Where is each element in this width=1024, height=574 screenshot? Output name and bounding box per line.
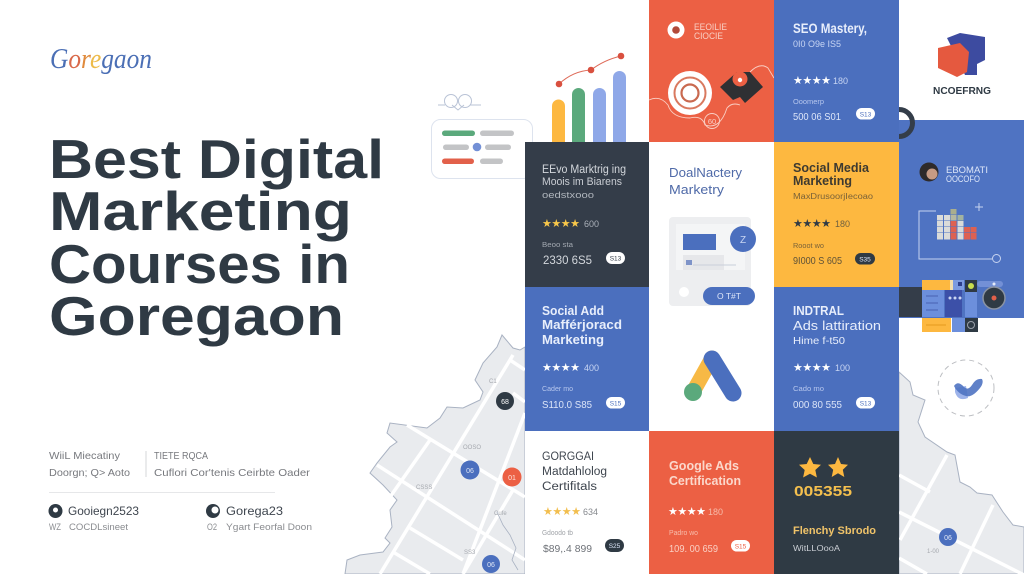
icon: Google Ads style logo bbox=[684, 358, 733, 401]
main title bbox=[49, 128, 384, 347]
footer: first location: Gooiegn2523 bbox=[68, 504, 139, 518]
icon: dark chevron shape bbox=[720, 72, 763, 103]
map: right area with roads and pin bbox=[899, 372, 1024, 574]
panel: INDTRAL blue card: Ads lattiration bbox=[793, 319, 881, 333]
panel: GORGGAI white card: Matdahlolog bbox=[542, 466, 607, 478]
panel: Google Ads orange card: ★★★★ bbox=[668, 505, 706, 518]
logo wordmark: NCOEFRNG bbox=[933, 85, 991, 97]
footer: course details: WiiL Miecatiny bbox=[49, 450, 121, 462]
panel: Google Ads orange card bbox=[649, 431, 774, 574]
icon: two gold stars bbox=[799, 457, 848, 478]
panel: EEvo Marketing dark card: 2330 6S5 bbox=[543, 255, 592, 267]
panel: top right white logo block bbox=[899, 0, 1024, 120]
panel: Social Media yellow card: Rooot wo bbox=[793, 243, 824, 250]
profile text: OOCOFO bbox=[946, 174, 980, 184]
icon: dashed circle with checkmark bbox=[938, 360, 994, 416]
panel: SEO Mastery card: S13 bbox=[860, 112, 872, 118]
panel: SEO Mastery card: ★★★★ bbox=[793, 74, 831, 87]
panel: Google Ads orange card: Certification bbox=[669, 473, 741, 488]
center card heading: DoalNactery bbox=[669, 165, 743, 180]
footer: course details: Cuflori Cor'tenis Ceirbte Oader bbox=[154, 467, 311, 479]
panel: GORGGAI white card: $89,.4 899 bbox=[543, 543, 592, 555]
panel: Google Ads orange card: Google Ads bbox=[669, 458, 739, 473]
icon: portrait bbox=[920, 162, 938, 182]
panel: Social Media yellow card: 9I000 S 605 bbox=[793, 255, 842, 267]
panel: SEO Mastery card: Ooomerp bbox=[793, 99, 824, 106]
panel: Social Add blue card: Cader mo bbox=[542, 386, 573, 393]
map labels: CSSS bbox=[416, 485, 432, 491]
map labels: Cufe bbox=[494, 511, 507, 517]
footer: second location: Gorega23 bbox=[226, 504, 283, 518]
panel: EEvo Marketing dark card: oedstxooo bbox=[542, 190, 594, 200]
panel: EEvo Marketing dark card: EEvo Marktrig ing bbox=[542, 164, 626, 176]
map pin: blue bbox=[460, 460, 480, 480]
profile text: EBOMATI bbox=[946, 165, 988, 175]
panel: GORGGAI white card bbox=[525, 431, 649, 574]
panel: INDTRAL blue card: ★★★★ bbox=[793, 361, 831, 374]
main title: Courses in bbox=[49, 233, 350, 295]
bar chart with trend line bbox=[552, 53, 626, 142]
panel: Social Media yellow card: Marketing bbox=[793, 173, 852, 188]
edit button: Z bbox=[740, 235, 746, 246]
panel: Google Ads orange card: 180 bbox=[708, 507, 723, 518]
panel: right blue dashboard bbox=[899, 120, 1024, 318]
panel: SEO Mastery card: SEO Mastery, bbox=[793, 20, 867, 36]
panel: SEO Mastery card: 180 bbox=[833, 76, 848, 87]
dark band bbox=[899, 287, 927, 317]
footer: course details: TIETE RQCA bbox=[154, 450, 208, 462]
small value badge: 60 bbox=[708, 117, 716, 126]
map pin: orange bbox=[502, 468, 522, 486]
panel: EEvo Marketing dark card bbox=[525, 142, 649, 287]
map labels: OOSO bbox=[463, 445, 481, 451]
map pin: blue: 06 bbox=[466, 468, 474, 475]
panel: SEO Mastery card: 0I0 O9e IS5 bbox=[793, 39, 841, 50]
panel: GORGGAI white card: Certifitals bbox=[542, 481, 597, 493]
panel: Google Ads orange card: 109. 00 659 bbox=[669, 543, 718, 555]
card label bbox=[694, 22, 727, 41]
footer: first location: COCDLsineet bbox=[69, 522, 129, 532]
panel: Social Media yellow card: Social Media bbox=[793, 160, 870, 175]
map pin: right blue bbox=[939, 528, 957, 546]
panel: SEO Mastery card: 500 06 S01 bbox=[793, 111, 841, 123]
map labels: SS3 bbox=[464, 550, 476, 556]
footer: first location bbox=[48, 504, 139, 532]
panel: orange icons card bbox=[649, 0, 774, 142]
panel: INDTRAL blue card: INDTRAL bbox=[793, 304, 844, 318]
panel: INDTRAL blue card: 000 80 555 bbox=[793, 399, 842, 411]
dashboard tile montage bbox=[922, 280, 1005, 332]
footer: second location: Ygart Feorfal Doon bbox=[226, 522, 312, 532]
panel: INDTRAL blue card: 100 bbox=[835, 363, 850, 374]
panel: Social Add blue card: S15 bbox=[610, 400, 622, 408]
map pin: orange: 01 bbox=[508, 475, 516, 482]
panel: EEvo Marketing dark card: Moois im Biarens bbox=[542, 176, 622, 188]
map: left area with roads and pins bbox=[345, 335, 525, 574]
panel: INDTRAL blue card bbox=[774, 287, 899, 431]
panel: INDTRAL blue card: S13 bbox=[860, 400, 872, 408]
panel: EEvo Marketing dark card: ★★★★ bbox=[542, 217, 580, 230]
panel: Social Add blue card: Marketing bbox=[542, 333, 604, 347]
footer: course details bbox=[49, 450, 311, 493]
map labels: C1 bbox=[489, 379, 497, 385]
panel: Social Add blue card bbox=[525, 287, 649, 431]
panel: SEO Mastery card bbox=[774, 0, 899, 142]
panel: EEvo Marketing dark card: 600 bbox=[584, 219, 599, 230]
footer info block bbox=[48, 450, 312, 532]
card label: EEOILIE bbox=[694, 22, 727, 32]
pill button: O T#T bbox=[717, 291, 741, 301]
center card heading: Marketry bbox=[669, 182, 725, 197]
map pin: dark: 68 bbox=[501, 399, 509, 406]
main title: Best Digital bbox=[49, 128, 384, 190]
footer: course details: Doorgn; Q> Aoto bbox=[49, 467, 130, 479]
panel: Social Media yellow card: S35 bbox=[859, 256, 871, 264]
map labels bbox=[416, 379, 507, 556]
panel: list widget bbox=[432, 120, 532, 178]
panel: INDTRAL blue card: Hime f-t50 bbox=[793, 335, 845, 347]
map pin: blue bottom bbox=[482, 555, 500, 573]
panel: GORGGAI white card: ★★★★ bbox=[543, 505, 581, 518]
map label: 1-00 bbox=[927, 549, 940, 555]
panel: Social Media yellow card: 180 bbox=[835, 219, 850, 230]
icon: dark ring bbox=[886, 110, 912, 136]
panel: center mockup card bbox=[649, 142, 774, 306]
heat grid chart bbox=[919, 203, 1000, 262]
panel: Social Add blue card: ★★★★ bbox=[542, 361, 580, 374]
map pin: blue bottom: 06 bbox=[487, 562, 495, 569]
card label: CIOCIE bbox=[694, 31, 723, 41]
panel: dark rating card: WitLLOooA bbox=[793, 544, 841, 553]
map pin: dark bbox=[496, 392, 514, 410]
main title: Goregaon bbox=[49, 285, 344, 347]
panel: EEvo Marketing dark card: S13 bbox=[610, 256, 622, 262]
panel: Social Add blue card: S110.0 S85 bbox=[542, 399, 592, 411]
map pin: right blue: 06 bbox=[944, 535, 952, 542]
panel: Social Add blue card: Social Add bbox=[542, 304, 604, 318]
panel: Social Add blue card: Mafférjoracd bbox=[542, 318, 622, 332]
icon: 3D cube logo bbox=[938, 33, 985, 77]
panel: dark rating card: 005355 bbox=[794, 483, 852, 500]
small value badge bbox=[704, 114, 720, 128]
connector curve bbox=[649, 66, 774, 126]
panel: GORGGAI white card: S25 bbox=[609, 543, 621, 550]
panel: EEvo Marketing dark card: Beoo sta bbox=[542, 242, 573, 249]
laptop mockup illustration bbox=[669, 217, 756, 306]
panel: INDTRAL blue card: Cado mo bbox=[793, 386, 824, 393]
icon: target bbox=[668, 71, 712, 115]
panel: GORGGAI white card: Gdoodo tb bbox=[542, 530, 573, 537]
main title: Marketing bbox=[49, 180, 352, 242]
panel: Social Media yellow card bbox=[774, 142, 899, 287]
profile text bbox=[946, 165, 988, 184]
panel: Social Media yellow card: ★★★★ bbox=[793, 217, 831, 230]
icon: badge bbox=[668, 22, 684, 38]
panel: dark rating card bbox=[774, 431, 899, 574]
brand logo: Goregaon: Goregaon bbox=[50, 43, 152, 75]
center card heading bbox=[669, 165, 743, 197]
footer: second location bbox=[206, 504, 312, 532]
footer: second location: O2 bbox=[207, 522, 217, 532]
panel: GORGGAI white card: GORGGAI bbox=[542, 451, 594, 463]
panel: Social Add blue card: 400 bbox=[584, 363, 599, 374]
icon: heart outline doodle bbox=[438, 94, 481, 110]
panel: dark rating card: Flenchy Sbrodo bbox=[793, 525, 876, 537]
panel: Social Media yellow card: MaxDrusoorjIecoao bbox=[793, 192, 874, 201]
panel: GORGGAI white card: 634 bbox=[583, 507, 598, 518]
panel: Google Ads orange card: S15 bbox=[735, 544, 747, 550]
footer: first location: WZ bbox=[49, 522, 61, 532]
panel: Google Ads orange card: Padro wo bbox=[669, 530, 698, 537]
